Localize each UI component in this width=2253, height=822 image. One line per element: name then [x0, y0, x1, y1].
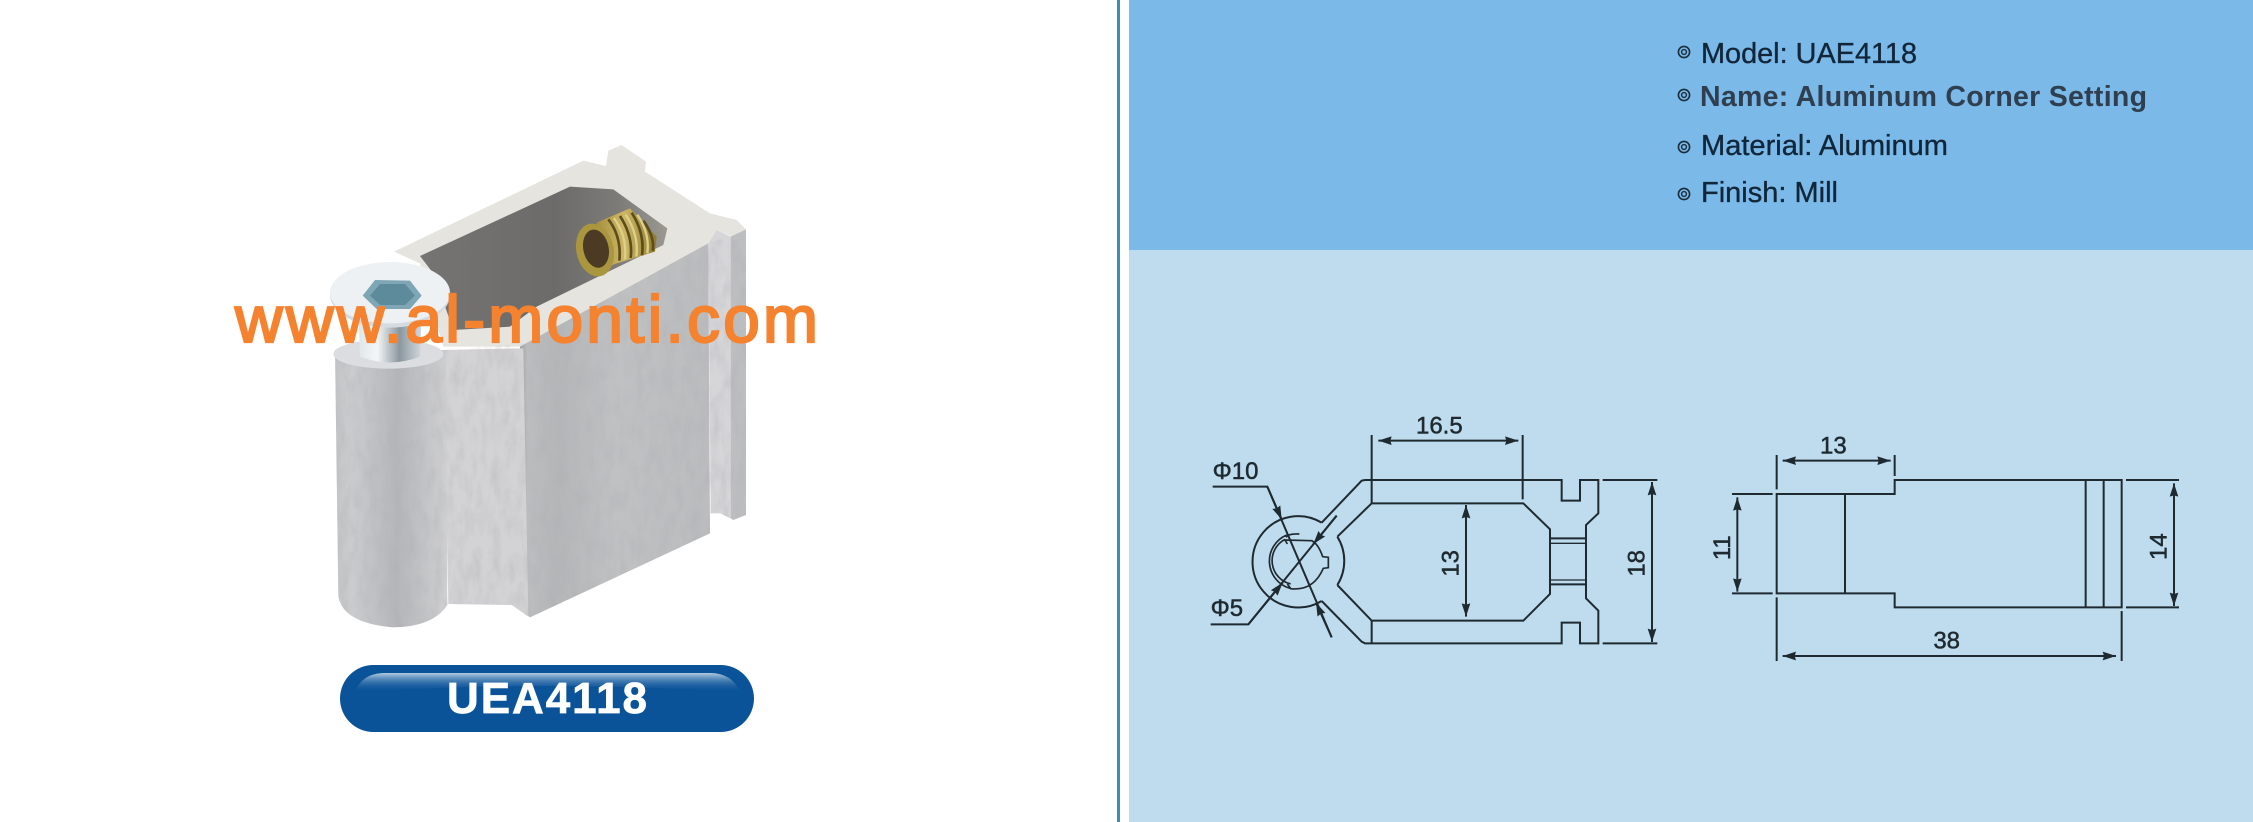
barrel cylinder	[335, 350, 447, 627]
dimension: 16.5: 16.5	[1416, 412, 1463, 439]
side outline	[1777, 480, 2122, 607]
dimension: phi 5: Φ5	[1211, 595, 1243, 622]
hex socket	[363, 280, 422, 309]
dimension: 13	[1437, 505, 1466, 617]
brushed texture	[345, 240, 731, 617]
dimension: phi 5	[1211, 516, 1337, 624]
dimension: 13	[1777, 432, 1895, 489]
model badge: UEA4118	[447, 674, 647, 723]
spec: model: Model: UAE4118	[1701, 38, 1917, 70]
cavity of extrusion	[420, 187, 667, 330]
model badge	[340, 665, 754, 732]
panel: specification header	[1129, 0, 2253, 250]
spec: finish: Finish: Mill	[1701, 177, 1838, 209]
spec: material: Material: Aluminum	[1701, 130, 1948, 162]
dimension: 16.5	[1378, 412, 1518, 441]
front face	[520, 243, 710, 617]
spec: name: Name: Aluminum Corner Setting	[1700, 81, 2147, 113]
profile outline	[1322, 480, 1598, 643]
dimension: 13: 13	[1437, 550, 1464, 577]
right flange groove	[708, 230, 731, 518]
dimension: 18: 18	[1623, 550, 1650, 577]
panel: drawing background	[1129, 250, 2253, 822]
keyed bore	[1269, 534, 1299, 588]
right flange strip	[731, 229, 746, 520]
brass set screw	[571, 208, 657, 280]
watermark url: www.al-monti.com	[234, 282, 818, 356]
top face of extrusion	[394, 145, 746, 347]
slot lines	[1550, 538, 1586, 584]
dimension: 38	[1777, 597, 2122, 661]
dimension: 14: 14	[2146, 533, 2173, 560]
dimension: phi 10: Φ10	[1213, 458, 1258, 485]
technical drawing: end profile	[1211, 412, 1657, 643]
dimension: 38: 38	[1933, 627, 1960, 654]
dimension: 11	[1709, 494, 1773, 593]
side face	[443, 348, 528, 617]
technical drawing: side view	[1709, 432, 2179, 661]
specification list	[1678, 38, 2147, 209]
panel: product photo	[234, 145, 818, 732]
screw neck	[358, 310, 422, 362]
screw head	[330, 262, 450, 328]
dimension: phi 10	[1213, 458, 1332, 637]
dimension: 11: 11	[1709, 535, 1736, 560]
dimension: 13: 13	[1820, 432, 1847, 459]
dimension: 18	[1603, 480, 1657, 643]
cylinder top ring	[333, 339, 443, 369]
photo: aluminum corner setting	[330, 145, 750, 633]
divider line between photo and specs	[1117, 0, 1120, 822]
dimension: 14	[2126, 480, 2179, 607]
